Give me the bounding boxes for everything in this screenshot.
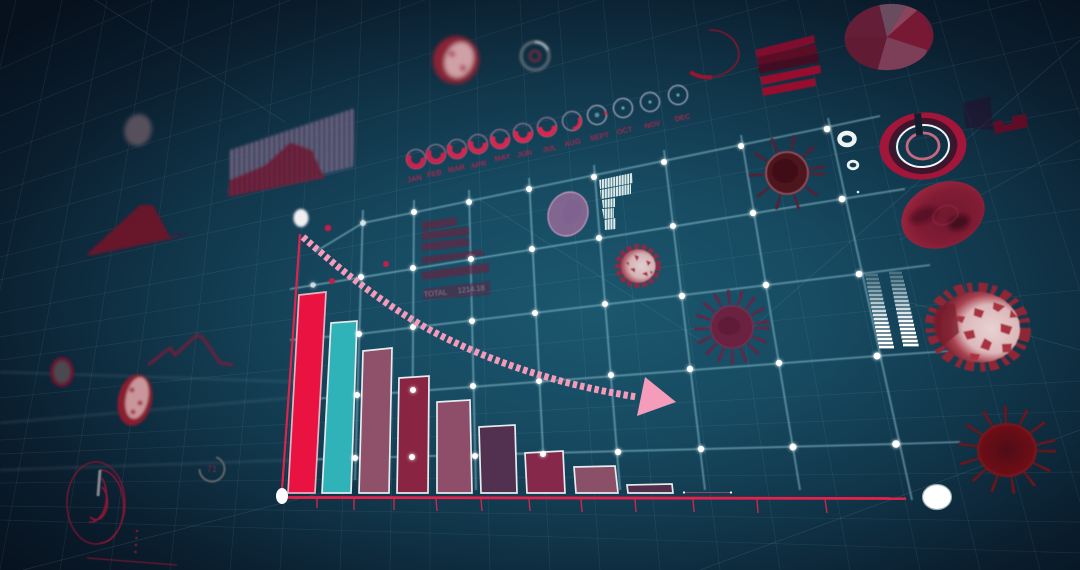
pie chart <box>844 4 934 70</box>
stacked red stripes <box>755 35 821 96</box>
icon: blurred small ring <box>50 357 74 387</box>
faint red block chart <box>963 96 1028 134</box>
icon: red blood cell <box>891 169 995 261</box>
gauge: red spiral <box>67 462 177 565</box>
gauge OCT <box>612 97 634 119</box>
gauge MAY <box>489 128 511 150</box>
month labels: MAY <box>494 151 511 164</box>
bar 2 <box>322 321 357 493</box>
month labels: JUL <box>542 143 558 154</box>
gauge: percent ring <box>196 453 228 485</box>
gauge DEC <box>667 84 689 106</box>
chart: blurred red mountain <box>88 205 190 256</box>
dashed falling curve <box>303 237 637 397</box>
gauge value: 71 <box>207 464 217 474</box>
bar 4 <box>397 376 429 493</box>
bar 1 <box>288 292 326 493</box>
bar 7 <box>525 451 565 493</box>
small red markers <box>325 225 389 284</box>
x axis end point <box>922 484 952 510</box>
month labels: NOV <box>644 118 661 131</box>
trend arrow <box>303 237 676 416</box>
origin point <box>276 488 288 504</box>
month labels: MAR <box>447 162 466 175</box>
month labels: JAN <box>406 173 423 185</box>
gauge APR <box>467 133 489 155</box>
gauge NOV <box>639 91 661 113</box>
gauge JUL <box>536 116 558 138</box>
circular power gauge <box>881 110 964 178</box>
near-zero bar markers <box>683 491 732 494</box>
arrow head <box>637 377 676 416</box>
chart: blurred striped area chart <box>228 108 355 197</box>
month labels: AUG <box>563 136 582 149</box>
gauge MAR <box>446 138 468 160</box>
bar chart <box>288 292 673 493</box>
icon: pale pink cell <box>541 185 595 243</box>
icon: blurred virus top <box>426 30 486 90</box>
month labels: FEB <box>426 167 443 180</box>
gauge JUN <box>512 122 534 144</box>
month labels: DEC <box>674 111 692 124</box>
white striped block chart <box>599 173 633 230</box>
gauge AUG <box>561 110 583 132</box>
gauge JAN <box>405 148 427 170</box>
icon: blurred ring top <box>521 42 549 70</box>
y axis top point <box>294 209 308 227</box>
month labels: JUN <box>516 148 533 160</box>
virus: muted middle <box>702 297 762 357</box>
month labels: SEPT <box>589 130 610 143</box>
y axis <box>282 234 300 490</box>
white ring indicators <box>840 133 859 193</box>
virus: dark red upper <box>757 143 817 203</box>
virus: deep red lower <box>969 416 1045 484</box>
icon: blurred grey cell <box>121 111 155 149</box>
bar 3 <box>359 348 392 493</box>
total value: 1214.18 <box>457 283 485 295</box>
grid dots <box>310 126 900 461</box>
gauge FEB <box>425 143 447 165</box>
total label: TOTAL <box>423 288 448 299</box>
bar 9 <box>627 484 673 493</box>
bar 6 <box>479 425 517 493</box>
axis end points <box>276 209 952 510</box>
virus: large pale <box>926 281 1030 373</box>
bar 8 <box>574 466 618 493</box>
bar 5 <box>437 400 472 493</box>
chart: total table panel <box>422 217 490 300</box>
gauge SEPT <box>584 102 610 128</box>
chart: red wavy line <box>148 335 233 365</box>
month labels: APR <box>470 158 488 171</box>
month labels: OCT <box>616 124 634 137</box>
month gauges <box>405 84 692 185</box>
main grid lines <box>290 116 960 500</box>
month labels <box>406 111 692 185</box>
x axis with ticks <box>282 498 906 513</box>
red partial arc <box>690 30 739 77</box>
icon: blurred virus left <box>113 371 157 429</box>
level meter stripes <box>865 273 919 347</box>
faint left grid extensions <box>0 372 355 470</box>
virus: centre small <box>618 247 658 285</box>
